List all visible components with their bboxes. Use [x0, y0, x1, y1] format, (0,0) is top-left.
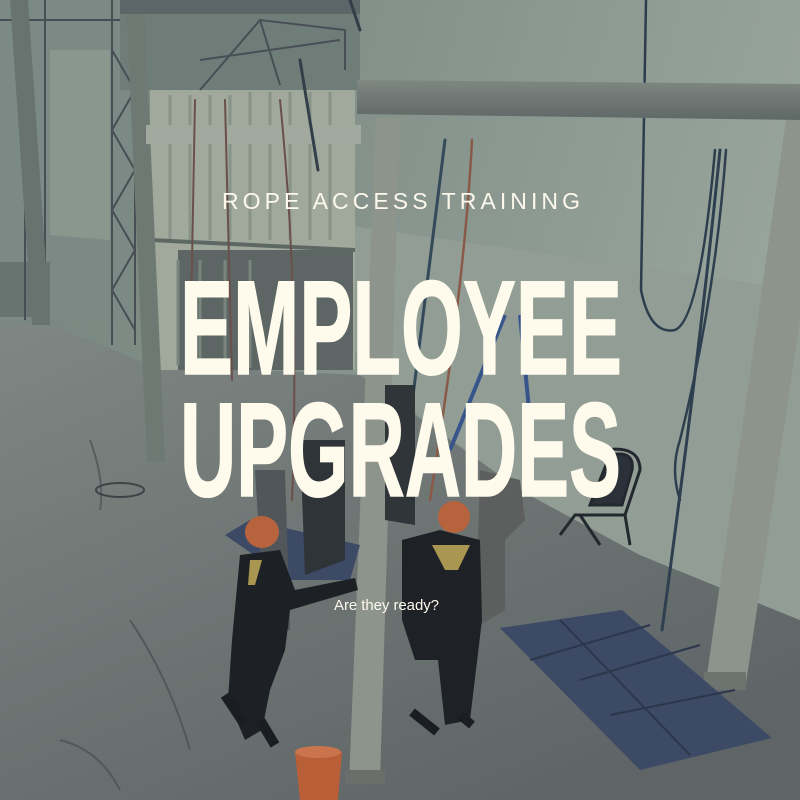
photo: chair	[560, 449, 640, 545]
tagline: Are they ready?	[334, 597, 439, 614]
photo: ropes	[190, 0, 726, 630]
photo: orange bucket	[295, 746, 342, 800]
photo: floor mats	[500, 610, 772, 770]
photo: left trainee	[225, 516, 358, 745]
photo: shipping container tower	[150, 90, 355, 370]
title: employee upgrades	[180, 254, 622, 525]
photo: ladder	[450, 315, 530, 450]
photo: left steel tower and truss	[0, 0, 345, 345]
photo: table mat behind trainees	[225, 520, 360, 580]
photo: background trainees	[255, 385, 525, 630]
photo: right trainee	[402, 501, 482, 732]
photo: left steel posts	[10, 0, 361, 462]
photo: front steel frame	[345, 80, 800, 784]
eyebrow text: ROPE ACCESS TRAINING	[222, 188, 580, 214]
